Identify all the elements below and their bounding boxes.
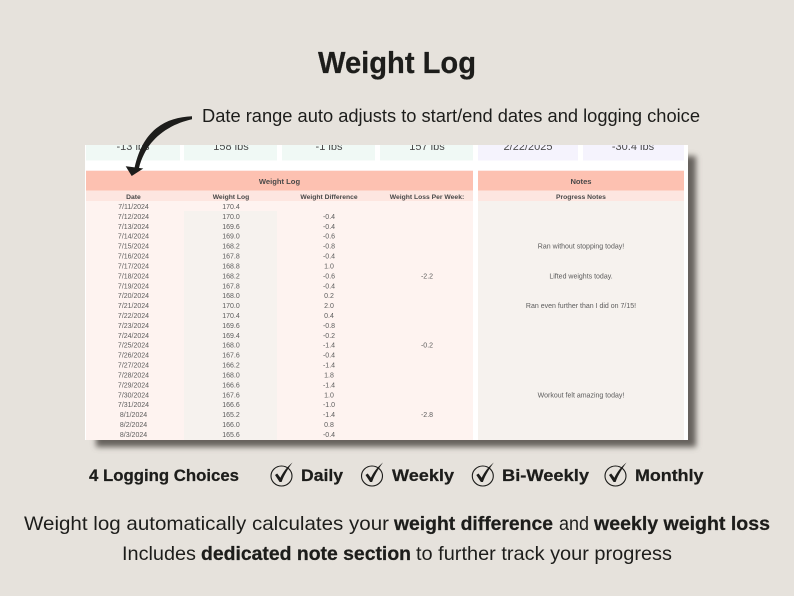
table rows: 0.4	[324, 313, 334, 320]
choice: bi-weekly: Bi-Weekly	[502, 466, 590, 485]
table rows: -0.6	[323, 273, 335, 280]
table rows: 7/20/2024	[118, 293, 149, 300]
progress notes text: Workout felt amazing today!	[538, 392, 624, 399]
choice: bi-weekly	[472, 462, 590, 486]
table rows: 166.6	[222, 382, 240, 389]
summary cards: 157 lbs	[409, 141, 445, 153]
table rows: 7/27/2024	[118, 363, 149, 370]
table rows: 1.0	[324, 264, 334, 270]
subtitle: date range note: Date range auto adjusts to start/end dates and logging choice	[202, 106, 700, 126]
table rows: -0.2	[421, 343, 433, 350]
table rows: 167.6	[222, 392, 240, 399]
icon: check circle	[362, 462, 383, 486]
table rows: 7/29/2024	[118, 382, 149, 389]
choice: weekly: Weekly	[392, 466, 455, 485]
table rows: -0.2	[323, 333, 335, 340]
table rows: 7/30/2024	[118, 392, 149, 399]
table rows: 169.0	[222, 234, 240, 241]
choice: daily: Daily	[301, 466, 344, 485]
table rows: 1.8	[324, 372, 334, 380]
table rows: -2.2	[421, 273, 433, 280]
table rows: 168.0	[222, 372, 240, 380]
summary cards: -13 lbs	[116, 141, 150, 153]
table rows: 167.6	[222, 353, 240, 360]
table rows: -1.4	[323, 363, 335, 370]
table rows: 7/15/2024	[118, 244, 149, 251]
table rows: 7/31/2024	[118, 402, 149, 409]
notes table: Notes	[570, 177, 592, 186]
notes table	[478, 171, 684, 440]
table rows: 7/18/2024	[118, 273, 149, 280]
table column headers: Weight Loss Per Week:	[390, 194, 464, 201]
table rows: 167.8	[222, 254, 240, 261]
table rows: 7/24/2024	[118, 333, 149, 340]
table rows: 7/14/2024	[118, 234, 149, 241]
table rows: 7/28/2024	[118, 372, 149, 380]
progress notes text: Ran even further than I did on 7/15!	[526, 303, 636, 310]
description line 1: and	[559, 513, 589, 535]
table rows: 1.0	[324, 392, 334, 399]
table rows: 168.0	[222, 343, 240, 350]
table rows: 7/19/2024	[118, 283, 149, 290]
table rows: 8/2/2024	[120, 422, 147, 429]
description line 1: Weight log automatically calculates your	[24, 513, 390, 535]
logging choices label: 4 Logging Choices	[89, 466, 239, 485]
table rows: 165.2	[222, 412, 240, 419]
table rows: 0.8	[324, 422, 334, 429]
table rows: 168.8	[222, 264, 240, 270]
choice: daily	[271, 462, 344, 486]
progress notes text: Ran without stopping today!	[538, 244, 624, 251]
table rows: 8/1/2024	[120, 412, 147, 419]
icon: check circle	[472, 462, 494, 486]
table rows: 170.4	[222, 313, 240, 320]
table rows: 169.6	[222, 323, 240, 330]
summary cards	[86, 145, 684, 160]
description line 2: Includes	[122, 543, 196, 565]
table rows: -0.4	[323, 353, 335, 360]
table rows: -0.4	[323, 224, 335, 231]
notes table: Progress Notes	[556, 194, 606, 201]
table rows: 170.0	[222, 214, 240, 221]
table rows	[118, 204, 433, 439]
table rows: 166.0	[222, 422, 240, 429]
table rows: -1.0	[323, 402, 335, 409]
panel: spreadsheet	[85, 140, 688, 440]
table rows: 166.2	[222, 363, 240, 370]
description line 1: weekly weight loss	[593, 513, 770, 535]
summary cards: -1 lbs	[316, 141, 343, 153]
table rows: 168.0	[222, 293, 240, 300]
table rows: 7/17/2024	[118, 264, 149, 270]
table rows: 168.2	[222, 273, 240, 280]
table rows: 7/16/2024	[118, 254, 149, 261]
description line 2: dedicated note section	[201, 543, 411, 565]
table rows: 7/13/2024	[118, 224, 149, 231]
table column headers: Date	[126, 194, 141, 201]
table rows: -0.4	[323, 214, 335, 221]
table rows: -2.8	[421, 412, 433, 419]
title: Weight Log	[318, 45, 476, 80]
table rows: 170.4	[222, 204, 240, 211]
description line 2: to further track your progress	[416, 543, 672, 565]
table rows: -0.6	[323, 234, 335, 241]
spreadsheet shadow	[96, 156, 696, 447]
table rows: -0.8	[323, 323, 335, 330]
description line 2	[122, 543, 672, 565]
table rows: 169.6	[222, 224, 240, 231]
table rows: -1.4	[323, 412, 335, 419]
weight log table: Weight Log	[259, 177, 300, 186]
description line 1: weight difference	[393, 513, 553, 535]
table rows: 0.2	[324, 293, 334, 300]
table column headers: Weight Log	[213, 194, 249, 201]
table column headers	[126, 194, 464, 200]
icon: check circle	[605, 462, 626, 486]
arrow: curved pointer to date range	[126, 116, 192, 176]
summary cards: 158 lbs	[213, 141, 249, 153]
choice: monthly: Monthly	[635, 466, 704, 485]
table column headers: Weight Difference	[300, 194, 358, 201]
weight log table	[86, 171, 473, 440]
table rows: -0.4	[323, 254, 335, 261]
table rows: -1.4	[323, 382, 335, 389]
progress notes text	[526, 244, 636, 399]
progress notes text: Lifted weights today.	[549, 273, 613, 280]
table rows: 170.0	[222, 303, 240, 310]
table rows: -0.4	[323, 432, 335, 439]
table rows: 2.0	[324, 303, 334, 310]
summary cards: -30.4 lbs	[612, 141, 655, 153]
table rows: 7/11/2024	[118, 204, 149, 211]
table rows: 8/3/2024	[120, 432, 147, 439]
choice: weekly	[362, 462, 455, 486]
table rows: 7/22/2024	[118, 313, 149, 320]
table rows: 7/23/2024	[118, 323, 149, 330]
table rows: 7/26/2024	[118, 353, 149, 360]
table rows: -0.8	[323, 244, 335, 251]
icon: check circle	[271, 462, 292, 486]
table rows: -1.4	[323, 343, 335, 350]
table rows: -0.4	[323, 283, 335, 290]
table rows: 7/21/2024	[118, 303, 149, 310]
description line 1	[24, 513, 770, 535]
table rows: 166.6	[222, 402, 240, 409]
table rows: 169.4	[222, 333, 240, 340]
table rows: 7/12/2024	[118, 214, 149, 221]
summary cards: 2/22/2025	[504, 141, 552, 153]
choice: monthly	[605, 462, 704, 486]
table rows: 167.8	[222, 283, 240, 290]
table rows: 7/25/2024	[118, 343, 149, 350]
table rows: 165.6	[222, 432, 240, 439]
table rows: 168.2	[222, 244, 240, 251]
